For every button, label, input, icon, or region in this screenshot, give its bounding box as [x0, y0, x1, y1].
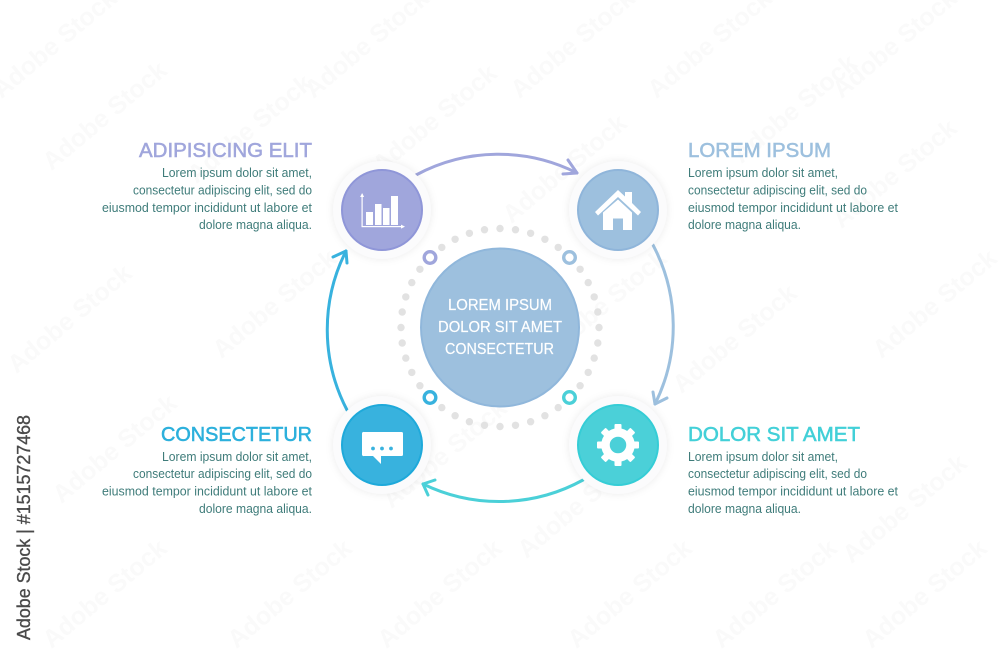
- node: speech bubble: [333, 396, 431, 494]
- center circle: [421, 248, 579, 406]
- text block: dolor sit amet: Lorem ipsum dolor sit amet,: [688, 450, 838, 464]
- stock id side label: Adobe Stock | #1515727468: [14, 415, 34, 640]
- center circle: LOREM IPSUM: [448, 297, 552, 314]
- text block: adipisicing elit: ADIPISICING ELIT: [139, 140, 312, 162]
- text block: adipisicing elit: [102, 140, 313, 232]
- text block: dolor sit amet: eiusmod tempor incididunt ut labore et: [688, 484, 899, 498]
- arrow: cyan to purple: [327, 251, 347, 410]
- node: chart: [333, 161, 431, 259]
- arrow: teal to cyan: [423, 480, 583, 502]
- dotted ring: [397, 225, 603, 430]
- watermark pattern: Adobe Stock: [182, 69, 317, 189]
- arrow: purple to blue: [416, 154, 577, 175]
- text block: lorem ipsum: [688, 140, 899, 232]
- watermark pattern: Adobe Stock: [222, 534, 357, 654]
- icon: bar chart: [360, 193, 405, 229]
- watermark pattern: Adobe Stock: [537, 244, 672, 364]
- icon: house: [595, 190, 641, 230]
- text block: consectetur: Lorem ipsum dolor sit amet,: [162, 450, 312, 464]
- text block: dolor sit amet: [688, 424, 899, 516]
- watermark pattern: Adobe Stock: [367, 59, 502, 179]
- text block: adipisicing elit: eiusmod tempor incididunt ut labore et: [102, 201, 313, 215]
- watermark pattern: Adobe Stock: [207, 244, 342, 364]
- watermark pattern: Adobe Stock: [2, 259, 137, 379]
- watermark pattern: Adobe Stock: [377, 394, 512, 514]
- center circle: CONSECTETUR: [445, 341, 554, 358]
- watermark pattern: Adobe Stock: [562, 534, 697, 654]
- text block: lorem ipsum: consectetur adipiscing elit, sed do: [688, 184, 867, 198]
- watermark pattern: Adobe Stock: [372, 534, 507, 654]
- watermark pattern: Adobe Stock: [497, 109, 632, 229]
- watermark pattern: Adobe Stock: [727, 49, 862, 169]
- watermark pattern: Adobe Stock: [837, 449, 972, 569]
- watermark pattern: Adobe Stock: [827, 114, 962, 234]
- center circle: DOLOR SIT AMET: [438, 319, 562, 336]
- watermark pattern: Adobe Stock: [667, 279, 802, 399]
- node: home: [569, 161, 667, 259]
- text block: consectetur: consectetur adipiscing elit, sed do: [133, 467, 312, 481]
- arrow: blue to teal: [653, 245, 673, 404]
- icon: chat bubble: [362, 432, 403, 464]
- text block: consectetur: [102, 424, 313, 516]
- text block: lorem ipsum: Lorem ipsum dolor sit amet,: [688, 166, 838, 180]
- text block: adipisicing elit: consectetur adipiscing elit, sed do: [133, 184, 312, 198]
- text block: consectetur: dolore magna aliqua.: [199, 502, 312, 516]
- text block: dolor sit amet: dolore magna aliqua.: [688, 502, 801, 516]
- icon: gear: [597, 424, 639, 466]
- watermark pattern: Adobe Stock: [47, 389, 182, 509]
- watermark pattern: Adobe Stock: [37, 56, 172, 176]
- text block: adipisicing elit: Lorem ipsum dolor sit amet,: [162, 166, 312, 180]
- text block: consectetur: CONSECTETUR: [161, 424, 312, 446]
- text block: consectetur: eiusmod tempor incididunt ut labore et: [102, 484, 313, 498]
- node: gear: [569, 396, 667, 494]
- text block: dolor sit amet: DOLOR SIT AMET: [688, 424, 860, 446]
- small ring markers: [424, 252, 575, 403]
- watermark pattern: Adobe Stock: [512, 444, 647, 564]
- watermark pattern: Adobe Stock: [707, 534, 842, 654]
- watermark pattern: Adobe Stock: [857, 534, 992, 654]
- text block: dolor sit amet: consectetur adipiscing elit, sed do: [688, 467, 867, 481]
- watermark pattern: Adobe Stock: [37, 534, 172, 654]
- text block: lorem ipsum: dolore magna aliqua.: [688, 218, 801, 232]
- text block: adipisicing elit: dolore magna aliqua.: [199, 218, 312, 232]
- text block: lorem ipsum: eiusmod tempor incididunt ut labore et: [688, 201, 899, 215]
- watermark pattern: Adobe Stock: [867, 244, 1000, 364]
- text block: lorem ipsum: LOREM IPSUM: [688, 140, 831, 162]
